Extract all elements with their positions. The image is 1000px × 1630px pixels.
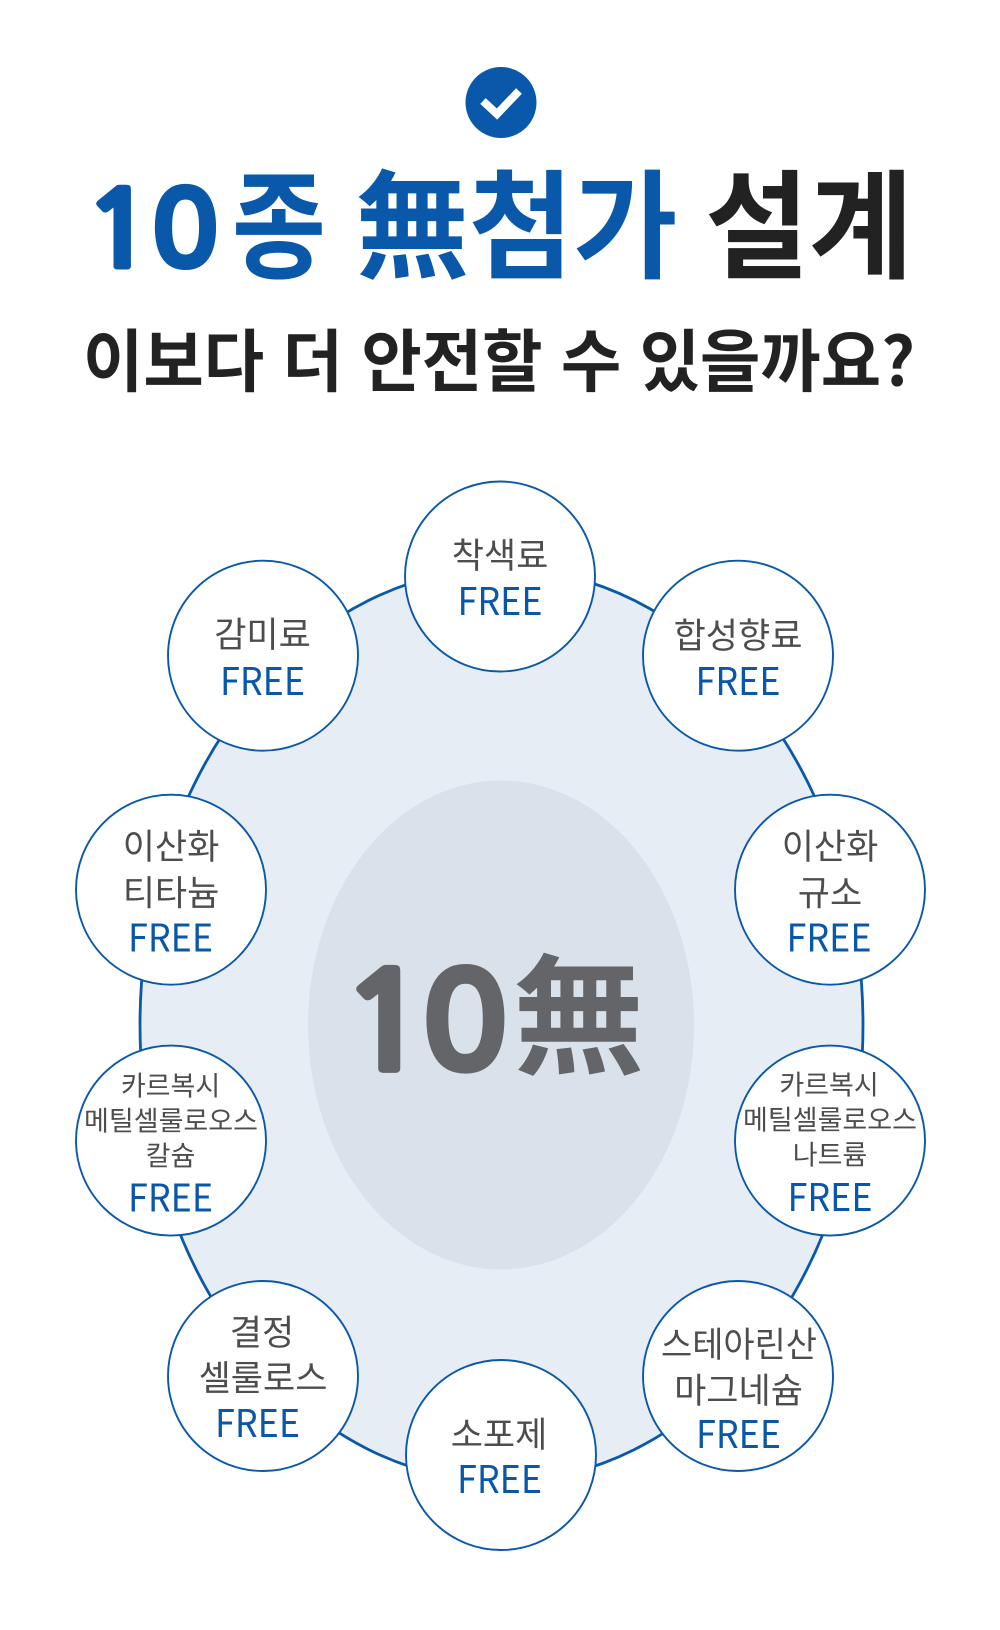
badge: 스테아린산 마그네슘: 마그네슘 <box>674 1363 803 1414</box>
badge: 카르복시메틸셀룰로오스 칼슘: 카르복시 <box>121 1064 220 1104</box>
title: 1 <box>83 177 156 283</box>
diagram: inner ellipse with 10無: 0 <box>421 957 509 1091</box>
badge: 착색료 <box>405 482 595 672</box>
badge: 소포제 <box>406 1360 596 1550</box>
badge: 카르복시메틸셀룰로오스 칼슘: 칼슘 <box>146 1134 195 1174</box>
diagram: inner ellipse with 10無: 無 <box>513 912 644 1102</box>
badge: 감미료: FREE <box>220 651 305 706</box>
badge: 결정 셀룰로스: 셀룰로스 <box>199 1350 327 1402</box>
badge: 이산화 규소: 이산화 <box>782 819 878 870</box>
badge: 이산화 규소: 규소 <box>798 866 862 916</box>
badge: 합성향료: 합성향료 <box>674 608 802 659</box>
icon: check badge <box>466 67 536 138</box>
badge: 이산화 티타늄: 이산화 <box>123 819 219 870</box>
badge: 카르복시메틸셀룰로오스 나트륨: 메틸셀룰로오스 <box>743 1098 917 1138</box>
subtitle: 이보다 더 안전할 수 있을까요? <box>83 307 915 406</box>
badge: 합성향료: FREE <box>696 651 780 706</box>
badge: 스테아린산 마그네슘 <box>643 1281 833 1471</box>
badge: 결정 셀룰로스: 결정 <box>230 1305 294 1356</box>
badge: 결정 셀룰로스 <box>168 1281 358 1471</box>
badge: 카르복시메틸셀룰로오스 나트륨: FREE <box>788 1167 872 1222</box>
badge: 카르복시메틸셀룰로오스 나트륨: 카르복시 <box>779 1064 879 1102</box>
diagram: inner ellipse with 10無: 1 <box>339 957 432 1091</box>
diagram: inner ellipse with 10無 <box>308 780 694 1270</box>
badge: 이산화 티타늄: FREE <box>128 908 213 963</box>
diagram: outer ellipse <box>140 568 863 1482</box>
title: 0 <box>151 177 220 283</box>
badge: 감미료 <box>168 561 358 751</box>
badge: 스테아린산 마그네슘: FREE <box>696 1404 781 1459</box>
badge: 이산화 규소: FREE <box>786 908 872 963</box>
badge: 착색료: 착색료 <box>452 528 548 579</box>
title: 종 <box>232 132 326 303</box>
badge: 착색료: FREE <box>458 571 542 626</box>
badge: 카르복시메틸셀룰로오스 칼슘: FREE <box>128 1168 213 1223</box>
badge: 결정 셀룰로스: FREE <box>215 1393 300 1448</box>
badge: 감미료: 감미료 <box>214 607 311 658</box>
badge: 스테아린산 마그네슘: 스테아린산 <box>661 1317 817 1368</box>
badge: 카르복시메틸셀룰로오스 나트륨: 나트륨 <box>793 1134 867 1172</box>
badge: 카르복시메틸셀룰로오스 칼슘 <box>76 1046 266 1236</box>
badge: 카르복시메틸셀룰로오스 나트륨 <box>735 1046 925 1236</box>
title: 無첨가 <box>356 132 678 303</box>
title <box>83 132 913 303</box>
badge: 이산화 티타늄 <box>76 795 266 985</box>
badge: 소포제: FREE <box>457 1449 542 1504</box>
badge: 소포제: 소포제 <box>451 1407 547 1458</box>
badge: 합성향료 <box>643 561 833 751</box>
title: 설계 <box>705 132 913 303</box>
badge: 카르복시메틸셀룰로오스 칼슘: 메틸셀룰로오스 <box>84 1100 258 1138</box>
badge: 이산화 티타늄: 티타늄 <box>123 866 219 916</box>
badge: 이산화 규소 <box>735 795 925 985</box>
